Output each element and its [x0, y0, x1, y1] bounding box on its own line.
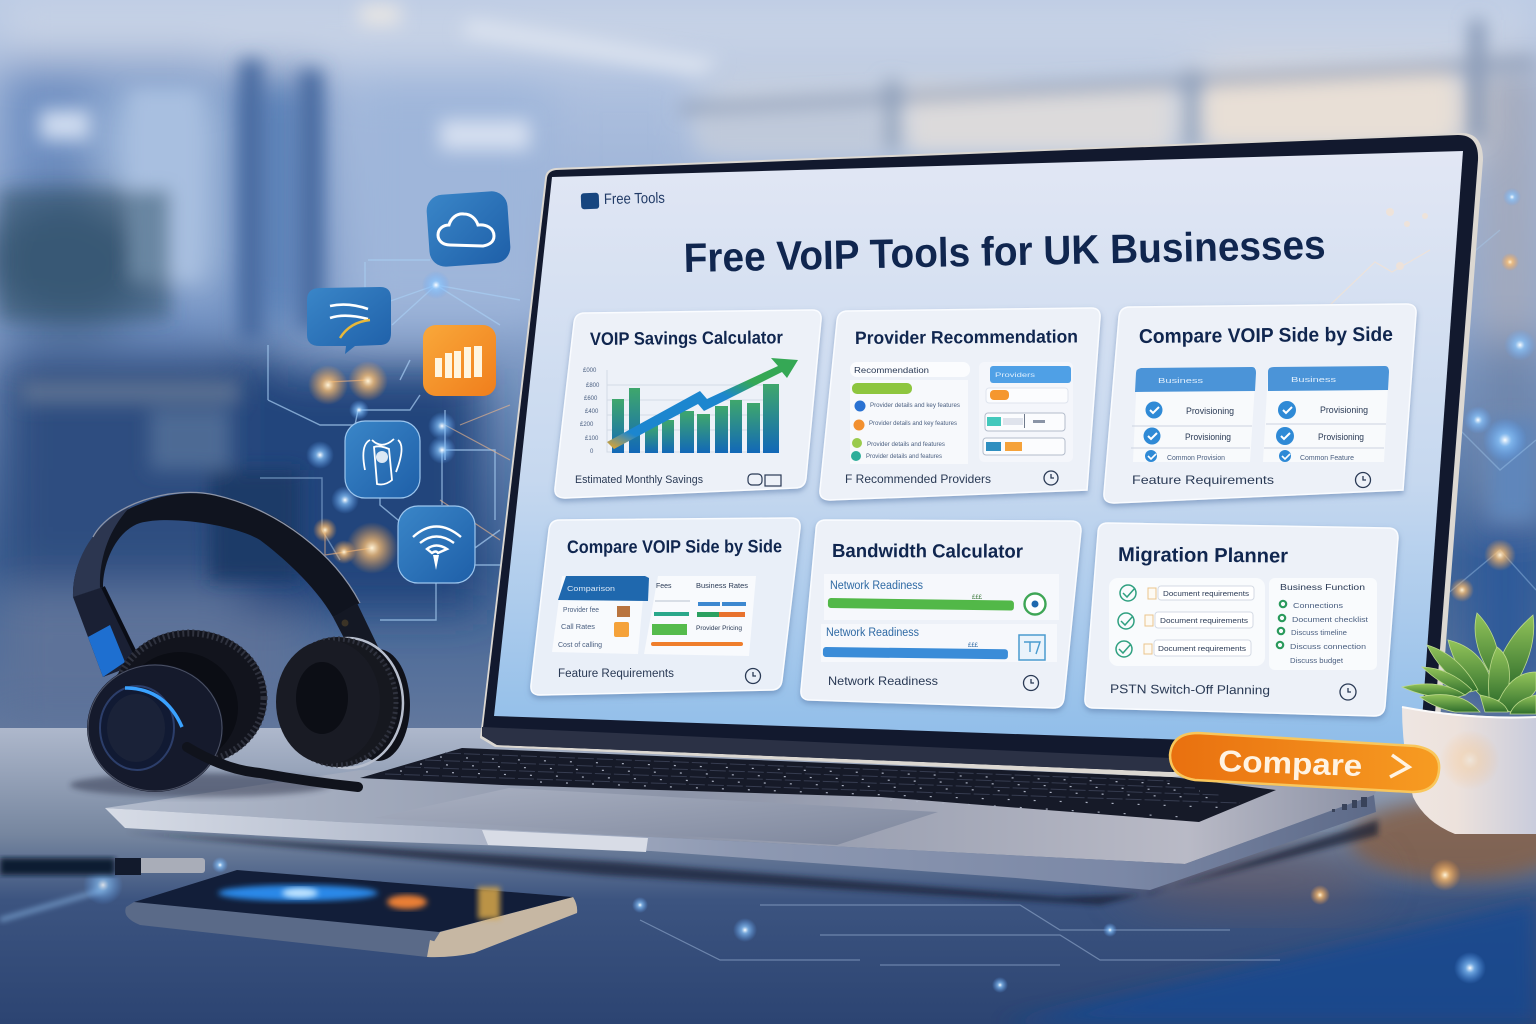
provider list: Provider details and key features — [869, 421, 957, 427]
panel: compare side by side, lower — [531, 518, 800, 695]
migration side list: Connections — [1293, 603, 1344, 610]
comparison column left: Common Provision — [1167, 455, 1225, 462]
comparison column right — [1263, 366, 1389, 462]
bar chart with rising arrow — [580, 358, 798, 455]
clock icon — [746, 668, 760, 684]
card heading: Bandwidth Calculator — [832, 541, 1024, 563]
floating app icons — [307, 190, 511, 583]
provider list — [850, 362, 970, 464]
bar chart with rising arrow: 0 — [590, 449, 594, 455]
migration checklist: Document requirements — [1160, 618, 1249, 625]
card heading: VOIP Savings Calculator — [590, 327, 783, 349]
migration checklist: Document requirements — [1158, 646, 1247, 653]
pen with blue glow — [0, 857, 228, 920]
microphone boom — [187, 747, 358, 787]
comparison column right: Business — [1291, 377, 1337, 384]
feature table left: Comparison — [567, 586, 615, 593]
feature table left: Provider fee — [563, 607, 599, 614]
migration checklist — [1109, 578, 1265, 666]
feature table right — [644, 576, 756, 656]
feature table right: Provider Pricing — [696, 626, 742, 632]
plant in white pot — [1402, 613, 1536, 834]
bar chart with rising arrow: £600 — [584, 396, 598, 402]
provider list: Recommendation — [854, 366, 929, 375]
left ear cup — [87, 630, 267, 792]
provider side panel — [979, 362, 1073, 462]
network readiness meter, green — [824, 574, 1059, 620]
card footer label: F Recommended Providers — [845, 472, 991, 486]
comparison column left: Provisioning — [1185, 432, 1231, 442]
clock icon — [1024, 676, 1038, 690]
network readiness meter, green: £££ — [972, 595, 983, 601]
provider list: Provider details and features — [867, 442, 945, 448]
panel: VoIP savings calculator — [555, 310, 821, 498]
card footer label: Estimated Monthly Savings — [575, 474, 703, 486]
network readiness meter, blue: £££ — [968, 643, 979, 649]
compare button — [1170, 733, 1439, 792]
icon: wifi — [398, 506, 475, 583]
panel: provider recommendation — [820, 308, 1100, 500]
bar chart with rising arrow: £100 — [585, 436, 599, 442]
migration checklist: Document requirements — [1163, 591, 1250, 598]
feature table right: Business Rates — [696, 583, 749, 590]
migration side list: Discuss budget — [1290, 658, 1343, 665]
footer icons — [748, 474, 781, 486]
laptop lid bezel — [480, 133, 1483, 777]
faint network seen through the screen — [1330, 208, 1430, 305]
card heading: Migration Planner — [1118, 544, 1288, 567]
migration side list: Document checklist — [1292, 617, 1368, 624]
feature table left — [552, 576, 649, 654]
comparison column left: Business — [1158, 378, 1204, 385]
laptop — [105, 133, 1483, 905]
network of glowing connections — [260, 188, 1536, 620]
migration side list: Discuss timeline — [1291, 630, 1347, 637]
comparison column right: Common Feature — [1300, 455, 1354, 462]
provider side panel: Providers — [995, 373, 1035, 379]
card footer label: PSTN Switch-Off Planning — [1110, 682, 1270, 697]
clock icon — [1356, 472, 1370, 488]
card footer label: Feature Requirements — [1132, 473, 1274, 487]
headband — [73, 492, 382, 677]
comparison column left — [1131, 367, 1256, 462]
provider list: Provider details and key features — [870, 403, 960, 409]
headset — [70, 492, 410, 797]
icon: chat bubble — [307, 287, 391, 354]
card heading: Provider Recommendation — [855, 326, 1078, 348]
migration side list: Discuss connection — [1290, 644, 1366, 651]
smartphone on desk — [0, 857, 577, 957]
panel: bandwidth calculator — [801, 520, 1081, 708]
network readiness meter, blue — [821, 624, 1057, 662]
bar chart with rising arrow: £800 — [586, 383, 600, 389]
network readiness meter, green: Network Readiness — [830, 580, 923, 592]
main title: Free VoIP Tools for UK Businesses — [683, 222, 1326, 281]
clock icon — [1044, 471, 1058, 485]
right ear cup — [276, 637, 410, 768]
compare button: Compare — [1218, 745, 1363, 783]
icon: handset — [345, 421, 420, 498]
comparison column right: Provisioning — [1320, 405, 1368, 415]
bar chart with rising arrow: £400 — [585, 409, 599, 415]
icon: bar chart — [423, 325, 496, 396]
panel: compare side by side — [1104, 304, 1416, 503]
card footer label: Network Readiness — [828, 674, 938, 688]
card footer label: Feature Requirements — [558, 668, 674, 680]
card heading: Compare VOIP Side by Side — [1139, 324, 1393, 348]
icon: cloud — [426, 190, 511, 268]
migration side list: Business Function — [1280, 583, 1365, 592]
bar chart with rising arrow: £000 — [583, 368, 597, 374]
network readiness meter, blue: Network Readiness — [826, 627, 919, 639]
provider list: Provider details and features — [866, 454, 942, 460]
migration side list — [1269, 578, 1377, 670]
brand logo — [581, 190, 665, 209]
panel: migration planner — [1085, 523, 1398, 716]
card heading: Compare VOIP Side by Side — [567, 536, 782, 557]
clock icon — [1340, 684, 1356, 700]
comparison column left: Provisioning — [1186, 406, 1234, 416]
feature table left: Cost of calling — [558, 642, 602, 649]
feature table right: Fees — [656, 583, 672, 590]
comparison column right: Provisioning — [1318, 432, 1364, 442]
desk surface — [0, 728, 1536, 1024]
laptop screen — [494, 151, 1463, 748]
bar chart with rising arrow: £200 — [580, 422, 594, 428]
feature table left: Call Rates — [561, 624, 596, 631]
brand logo: Free Tools — [604, 190, 665, 208]
laptop base and keyboard deck — [105, 742, 1378, 905]
